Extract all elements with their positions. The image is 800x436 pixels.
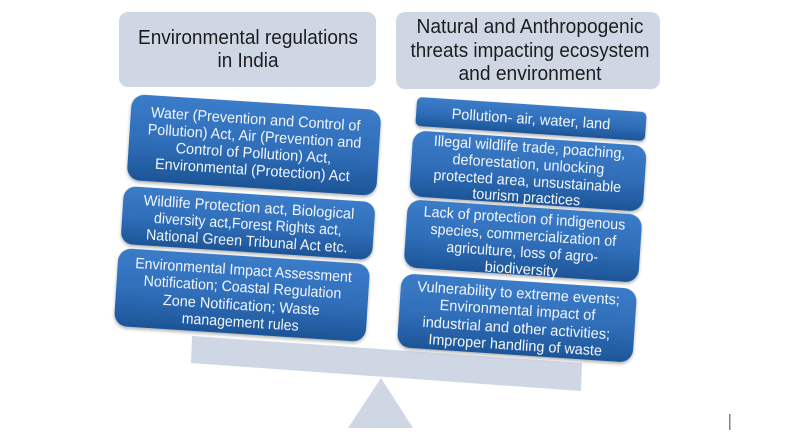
text: notifications list: Zone Notification; Waste (162, 292, 320, 319)
text: acts list one: Pollution) Act, Air (Prevention and (147, 121, 362, 152)
text: notifications list: Environmental Impact Assessment (135, 255, 353, 286)
panel: illegal wildlife trade (409, 130, 647, 214)
text: illegal wildlife trade: protected area, unsustainable (433, 167, 622, 196)
balance fulcrum triangle (348, 378, 413, 428)
heading text right: Natural and Anthropogenic (416, 16, 644, 38)
heading text left (138, 27, 358, 72)
text: acts list two (141, 192, 355, 257)
text: illegal wildlife trade: deforestation, unlocking (452, 151, 605, 178)
text: vulnerability: industrial and other activities; (422, 314, 611, 343)
text: illegal wildlife trade: tourism practices (472, 185, 581, 210)
panel: notifications and rules (114, 248, 370, 342)
text: lack of protection: species, commercialization of (430, 221, 617, 250)
text: vulnerability (413, 278, 620, 361)
panel: vulnerability and waste (397, 273, 637, 363)
text: acts list two: Wildlife Protection act, Biological (143, 192, 355, 223)
text: pollution: Pollution- air, water, land (451, 106, 611, 133)
panel: lack of protection of species (403, 199, 642, 286)
balance beam (191, 336, 582, 391)
heading text left: in India (218, 50, 279, 72)
cursor tick mark (729, 414, 730, 430)
heading text right: threats impacting ecosystem (410, 40, 650, 62)
text: vulnerability: Environmental impact of (439, 297, 597, 324)
text: lack of protection: agriculture, loss of agro- (446, 239, 599, 266)
text: acts list two: diversity act,Forest Rights act, (154, 210, 342, 239)
text: illegal wildlife trade: Illegal wildlife trade, poaching, (433, 133, 626, 162)
heading panel: Environmental regulations in India (119, 12, 376, 87)
heading panel: Natural and Anthropogenic threats (396, 12, 660, 89)
text: notifications list (131, 255, 353, 338)
text: acts list two: National Green Tribunal Act etc. (145, 226, 348, 256)
heading text right: and environment (458, 63, 602, 85)
text: acts list one: Water (Prevention and Control of (150, 104, 362, 135)
text: lack of protection: biodiversity (484, 259, 559, 280)
text: acts list one: Environmental (Protection) Act (155, 156, 351, 185)
heading text right (410, 16, 650, 85)
panel: water, air and environment acts (126, 94, 382, 196)
text: acts list one (145, 104, 363, 186)
panel: wildlife and biodiversity acts (120, 186, 376, 260)
panel: pollution (415, 97, 647, 141)
heading text left: Environmental regulations (138, 27, 358, 49)
text: lack of protection: Lack of protection of indigenous (423, 203, 626, 234)
text: vulnerability: Improper handling of waste (428, 331, 603, 360)
text: lack of protection (420, 203, 626, 285)
text: notifications list: Notification; Coastal Regulation (143, 273, 342, 302)
text: illegal wildlife trade (430, 133, 626, 212)
text: acts list one: Control of Pollution) Act, (175, 140, 332, 167)
text: notifications list: management rules (181, 310, 299, 335)
text: vulnerability: Vulnerability to extreme events; (417, 278, 620, 309)
